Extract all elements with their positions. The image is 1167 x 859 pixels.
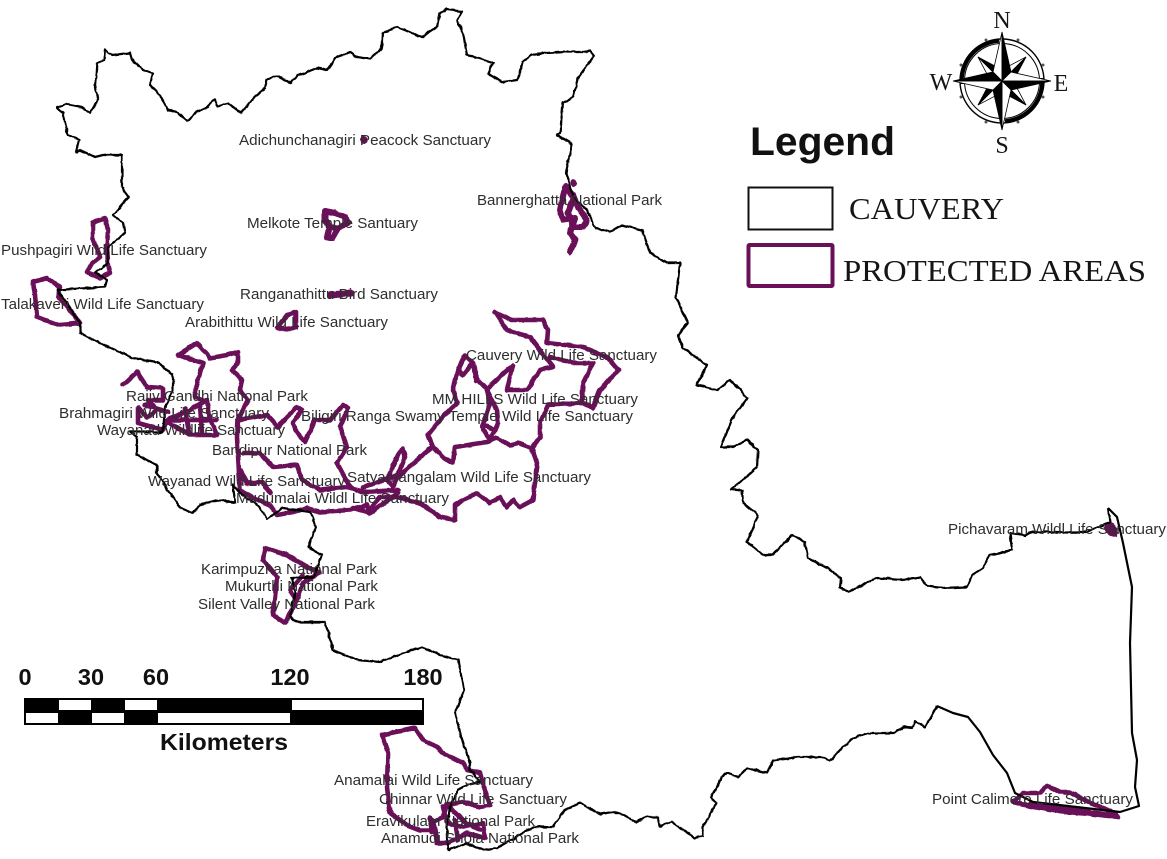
compass letters: S [995,133,1009,159]
scale numbers: 30 [78,664,104,690]
label: Bandipur: Bandipur National Park [212,443,368,459]
legend title: Legend [750,120,895,164]
label: Anamalai: Anamalai Wild Life Sanctuary [334,773,534,789]
label: Cauvery: Cauvery Wild Life Sanctuary [466,348,658,364]
protected area: Melkote [325,211,348,238]
protected area: Cauvery and MM Hills [428,312,618,463]
protected area: Pushpagiri [87,218,110,278]
label: Mukurthi: Mukurthi National Park [225,579,379,595]
label: Eravikulam: Eravikulam National Park [366,814,536,830]
scale unit: Kilometers [160,729,288,755]
label: Pichavaram: Pichavaram Wildl Life Sanctuary [948,522,1167,538]
label: Talakaveri: Talakaveri Wild Life Sanctuary [1,297,205,313]
compass letters [930,8,1068,159]
label: Mudumalai: Mudumalai Wildl Life Sanctuary [236,491,450,507]
protected area: Ranganathittu [331,293,351,295]
label: Adichunchanagiri: Adichunchanagiri Peacock Sanctuary [239,133,492,149]
protected area: Bandipur and Wayanad [237,420,398,515]
scale numbers: 180 [403,664,443,690]
label: Brahmagiri: Brahmagiri Wild Life Sanctuary [59,406,270,422]
compass letters: W [930,70,953,96]
protected area: Anamalai, Chinnar, Eravikulam, Anamudi [382,728,490,843]
icon: compass rose [930,8,1068,159]
label: Biligiri Ranga Swamy: Biligiri Ranga Swamy Temple Wild Life Sanctuary [301,409,634,425]
label: Pushpagiri: Pushpagiri Wild Life Sanctuary [1,243,208,259]
compass star [953,32,1051,130]
scale numbers [18,664,443,690]
protected area: inner Cauvery loop [458,357,593,440]
scale bar graphic [24,698,424,725]
protected area: Rajiv Gandhi and Brahmagiri [123,343,398,492]
scale bar [18,664,443,755]
protected area: Adichunchanagiri [360,136,368,144]
protected area: Arabithittu [277,312,296,330]
river basin: coastal boundary [937,508,1139,812]
scale numbers: 0 [18,664,32,690]
protected area: Sathyamangalam [353,447,537,520]
protected area: Point Calimere [1013,786,1118,817]
scale numbers: 60 [143,664,169,690]
legend swatch: Protected Areas [748,245,832,286]
scale numbers: 120 [270,664,310,690]
label: Wayanad Wildlife: Wayanad Wildlife Sanctuary [97,423,286,439]
label: Anamudi Shola: Anamudi Shola National Park [381,831,580,847]
legend swatch: Cauvery [748,188,832,230]
legend label: Protected Areas: PROTECTED AREAS [843,253,1146,288]
map: protected area boundaries [33,136,1118,843]
label: Wayanad Wild Life: Wayanad Wild Life Sanctuary [148,474,346,490]
label: Karimpuzha: Karimpuzha National Park [201,562,378,578]
protected area: Karimpuzha, Mukurthi, Silent Valley [263,548,320,623]
label: Bannerghatta: Bannerghatta National Park [477,193,663,209]
protected area: Talakaveri [33,278,80,325]
label: Point Calimere: Point Calimere Life Sanctuary [932,792,1134,808]
label: Satyamangalam: Satyamangalam Wild Life Sanctuary [347,470,592,486]
label: Silent Valley: Silent Valley National Park [198,597,376,613]
legend [748,120,1146,288]
label: Rajiv Gandhi: Rajiv Gandhi National Park [126,389,309,405]
label: Melkote: Melkote Temple Santuary [247,216,419,232]
compass letters: E [1054,71,1068,97]
protected area: Pichavaram [1104,521,1118,537]
compass letters: N [993,8,1011,34]
label: Ranganathittu: Ranganathittu Bird Sanctuary [240,287,439,303]
legend label: Cauvery: CAUVERY [849,191,1004,226]
label: Chinnar: Chinnar Wild Life Sanctuary [379,792,568,808]
label: Arabithittu: Arabithittu Wild Life Sanctuary [185,315,389,331]
label: MM Hills: MM HILLS Wild Life Sanctuary [432,392,639,408]
protected area: Bannerghatta [560,182,587,252]
compass ring [960,38,1044,124]
